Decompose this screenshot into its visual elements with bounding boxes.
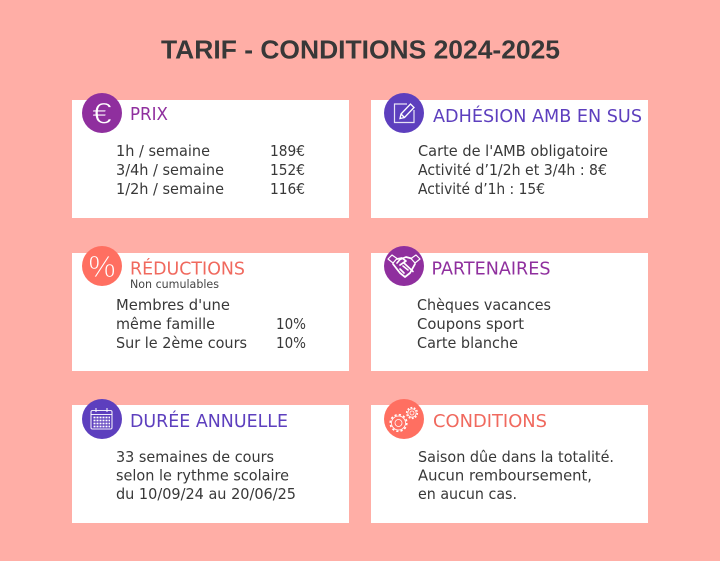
text: partenaires list: Coupons sport <box>417 315 524 333</box>
icon: euro: € <box>92 98 112 130</box>
text: reductions list: 10% <box>276 315 306 333</box>
text: conditions details: en aucun cas. <box>418 485 517 503</box>
panel: conditions <box>371 399 648 523</box>
icon: euro <box>82 93 122 133</box>
text: reductions list <box>116 296 306 352</box>
text: reductions list: Membres d'une <box>116 296 230 314</box>
text: adhesion details: Activité d’1h : 15€ <box>418 180 545 198</box>
icon: edit <box>384 93 424 133</box>
text: price list: 1/2h / semaine <box>116 180 224 198</box>
icon: percent: % <box>88 249 116 284</box>
text: price list: 152€ <box>270 161 305 179</box>
text: adhesion details: Carte de l'AMB obligatoire <box>418 142 608 160</box>
panel: adhesion <box>371 93 648 218</box>
text: partenaires list: Chèques vacances <box>417 296 551 314</box>
icon: percent <box>82 246 122 286</box>
text: adhesion details: Activité d’1/2h et 3/4h : 8€ <box>418 161 607 179</box>
text: conditions details: Aucun remboursement, <box>418 466 592 484</box>
text: reductions list: 10% <box>276 334 306 352</box>
heading: conditions: CONDITIONS <box>433 411 547 432</box>
text: duree details <box>116 448 296 503</box>
heading: adhesion: ADHÉSION AMB EN SUS <box>433 105 642 127</box>
text: duree details: selon le rythme scolaire <box>116 466 289 484</box>
text: reductions list: Sur le 2ème cours <box>116 334 247 352</box>
text: price list: 3/4h / semaine <box>116 161 224 179</box>
panel: prix <box>72 93 349 218</box>
heading: reductions: RÉDUCTIONS <box>130 258 245 280</box>
text: price list: 1h / semaine <box>116 142 210 160</box>
text: reductions list: même famille <box>116 315 215 333</box>
text: adhesion details <box>418 142 608 198</box>
text: price list: 116€ <box>270 180 305 198</box>
heading: duree annuelle: DURÉE ANNUELLE <box>130 410 288 432</box>
title: TARIF - CONDITIONS 2024-2025 <box>161 36 560 64</box>
panel: partenaires <box>371 246 648 371</box>
text: price list <box>116 142 305 198</box>
text: duree details: 33 semaines de cours <box>116 448 274 466</box>
icon: gears <box>384 399 424 439</box>
text: conditions details <box>418 448 614 503</box>
panel: duree annuelle <box>72 399 349 523</box>
text: partenaires list: Carte blanche <box>417 334 518 352</box>
icon: handshake <box>384 246 424 286</box>
text: conditions details: Saison dûe dans la totalité. <box>418 448 614 466</box>
icon: calendar <box>82 399 122 439</box>
heading: prix: PRIX <box>130 104 168 125</box>
text: duree details: du 10/09/24 au 20/06/25 <box>116 485 296 503</box>
heading: partenaires: PARTENAIRES <box>432 258 550 280</box>
text: non cumulables: Non cumulables <box>130 277 219 291</box>
panel: reductions <box>72 246 349 371</box>
text: partenaires list <box>417 296 551 352</box>
text: price list: 189€ <box>270 142 305 160</box>
